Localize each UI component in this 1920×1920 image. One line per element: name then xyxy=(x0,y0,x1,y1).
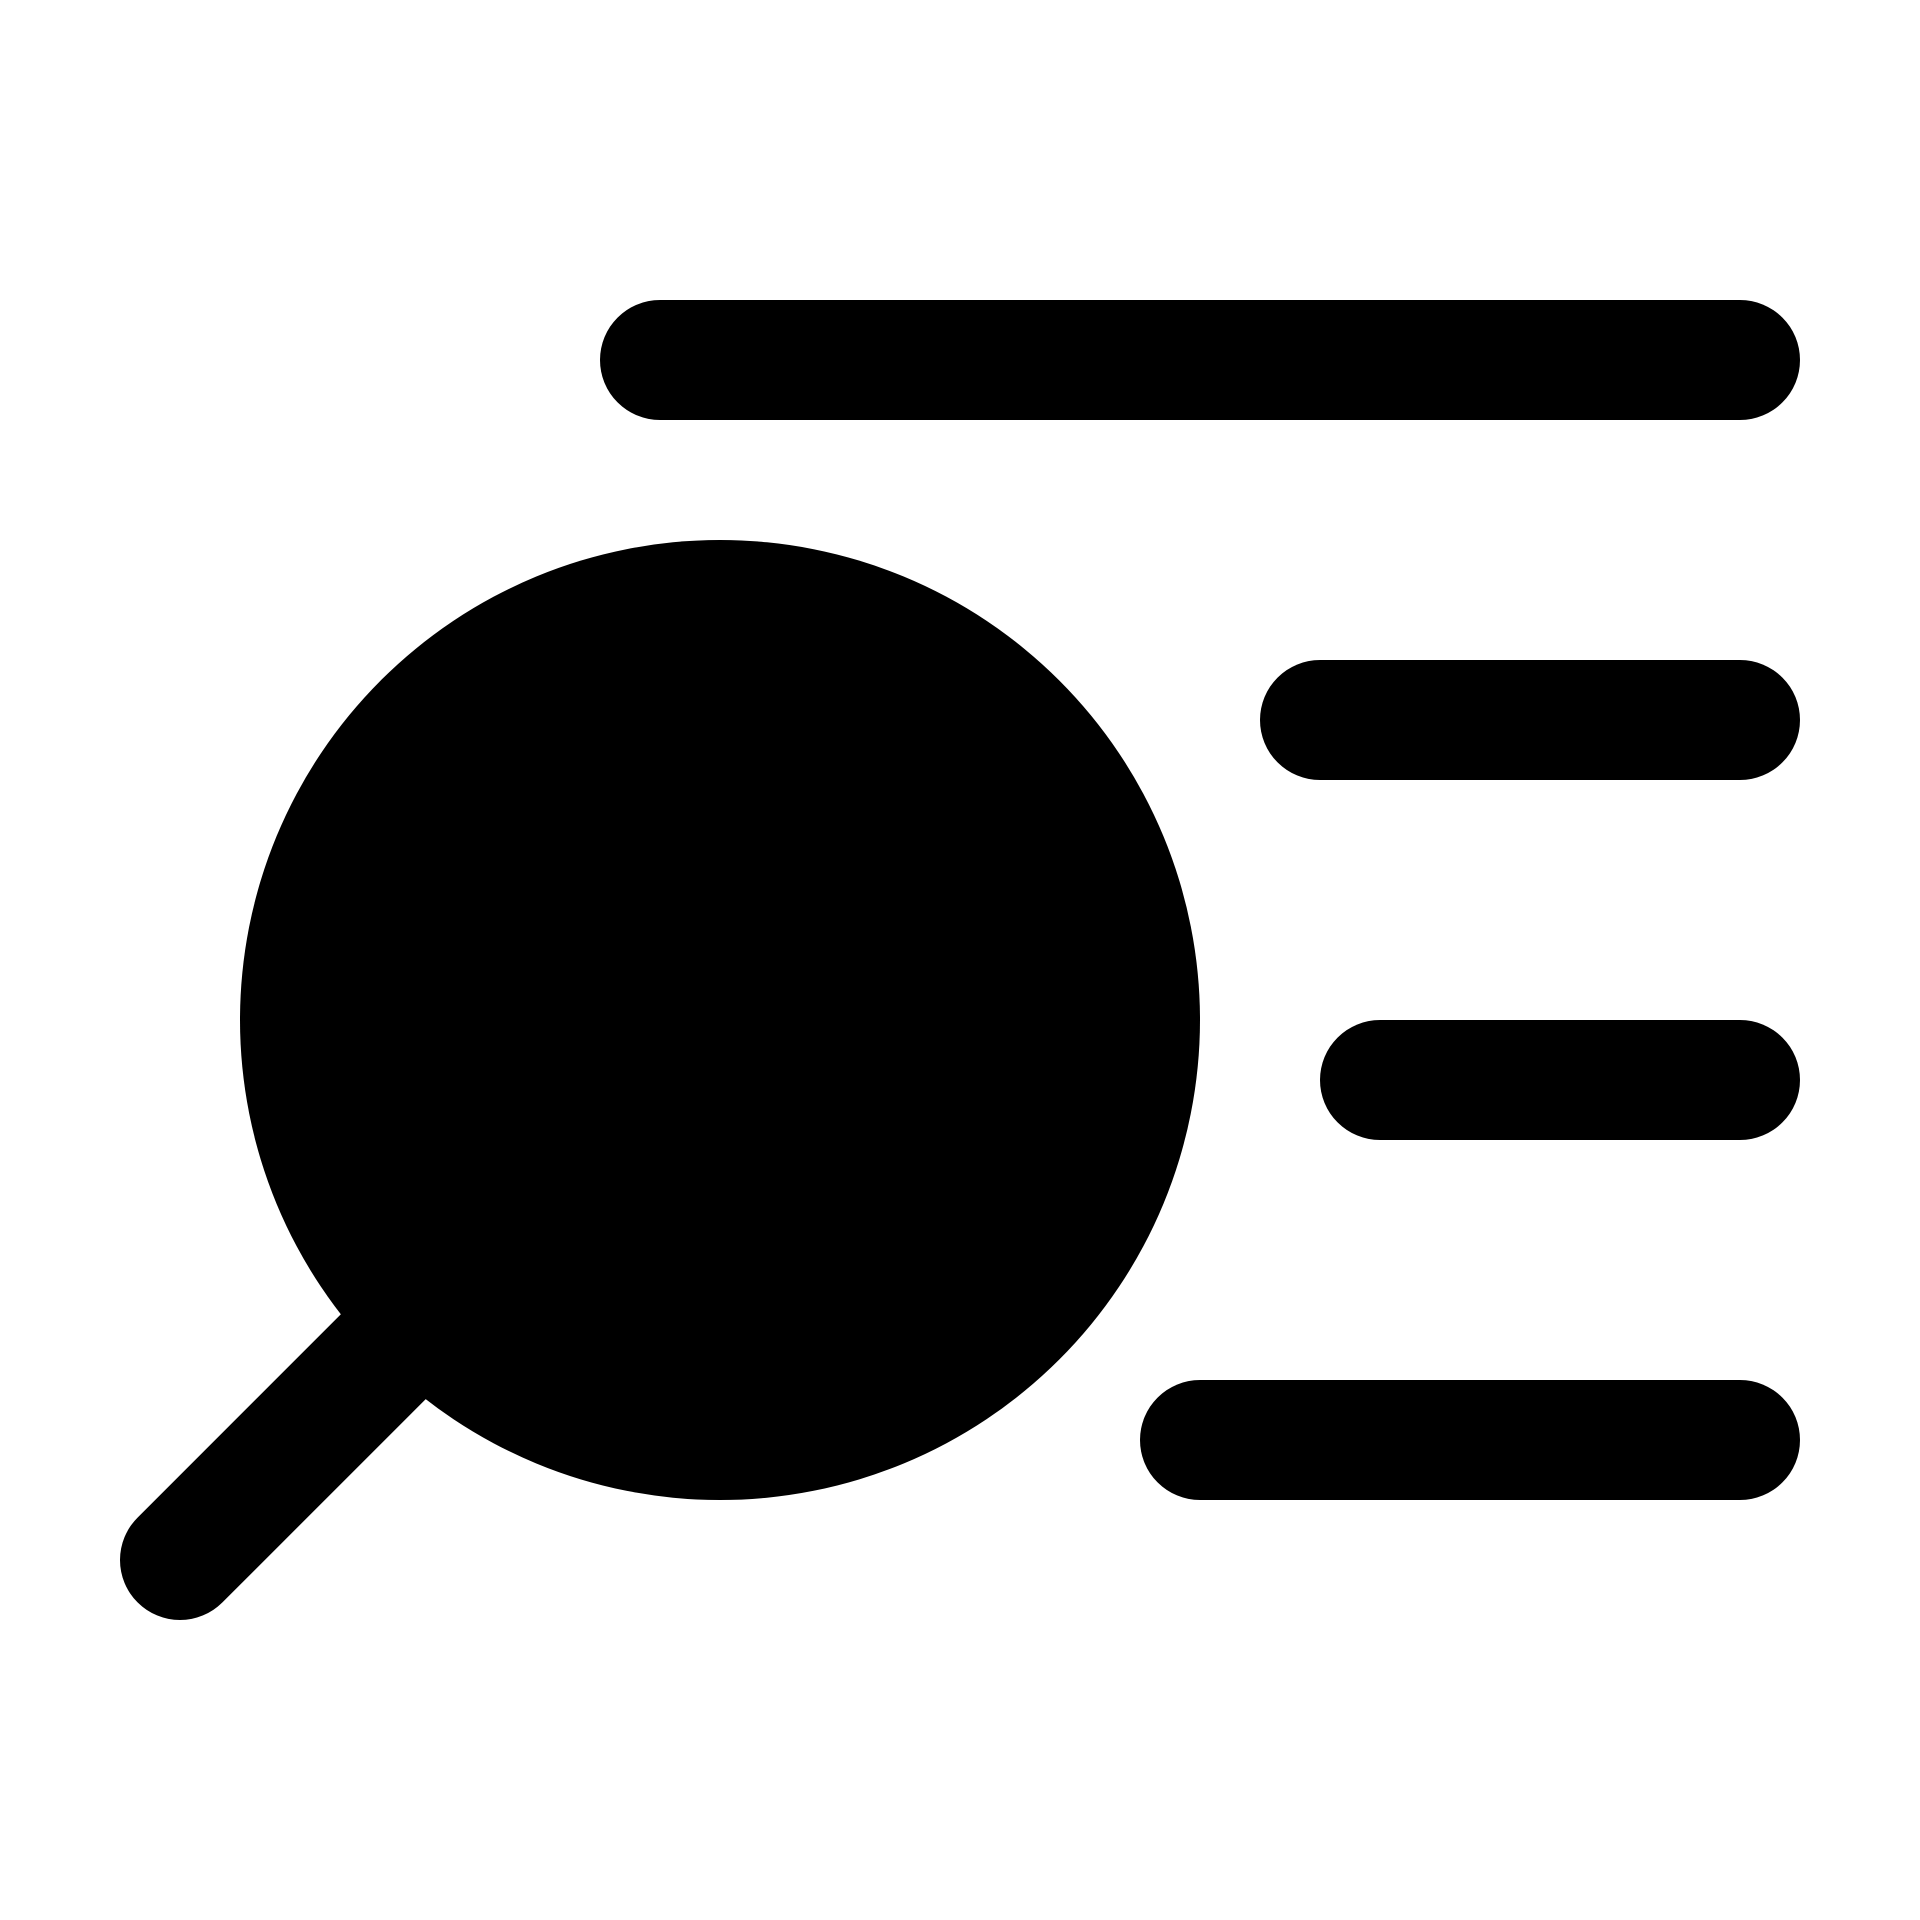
magnifying glass handle xyxy=(180,1260,480,1560)
list lines xyxy=(660,360,1740,1440)
list line 4 xyxy=(1200,1380,1740,1500)
icon: magnifying glass xyxy=(180,540,1200,1560)
list line 2 xyxy=(1320,660,1740,780)
list line 1 xyxy=(660,300,1740,420)
magnifying glass lens xyxy=(240,540,1200,1500)
list line 3 xyxy=(1380,1020,1740,1140)
